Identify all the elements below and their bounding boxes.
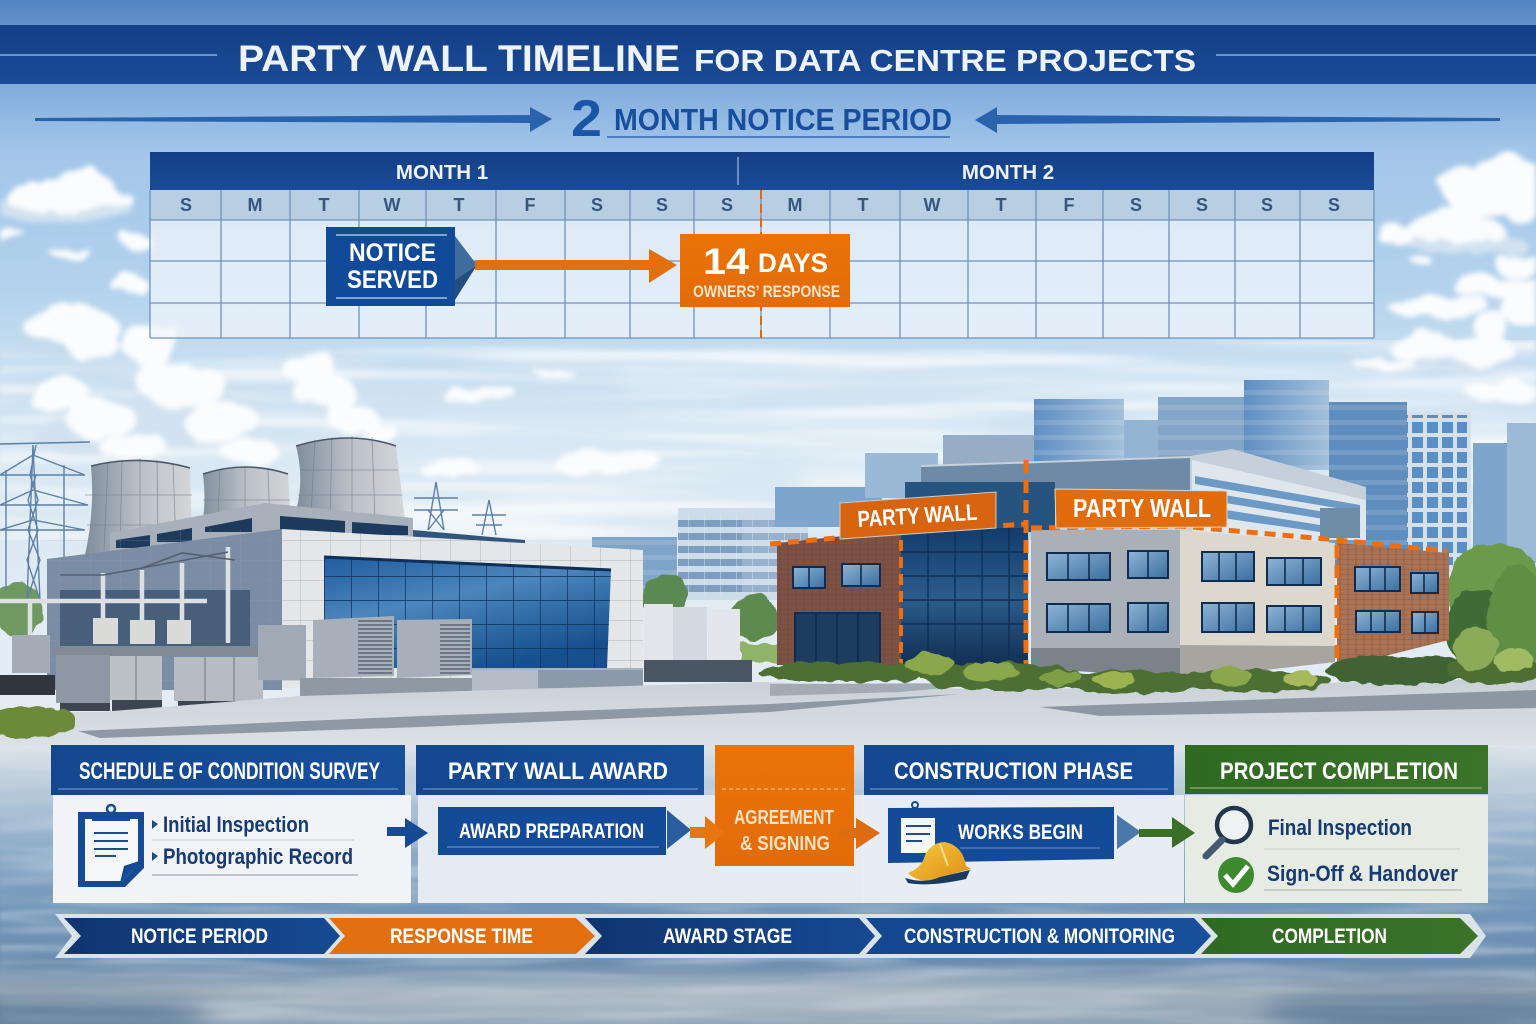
notice served marker: NOTICE	[349, 239, 436, 267]
chevron: construction and monitoring: CONSTRUCTION & MONITORING	[904, 925, 1175, 948]
weekday row: S	[721, 195, 733, 215]
cooling towers	[85, 436, 405, 555]
chevron: notice period: NOTICE PERIOD	[131, 925, 268, 948]
weekday row: S	[591, 195, 603, 215]
header: completion	[1185, 745, 1488, 794]
award preparation box: AWARD PREPARATION	[459, 820, 644, 843]
chevron: completion: COMPLETION	[1272, 925, 1387, 948]
chevron: response time: RESPONSE TIME	[390, 925, 533, 948]
cream concrete block	[1180, 530, 1335, 678]
left brick block	[777, 530, 901, 665]
data centre building	[47, 503, 643, 690]
windows	[793, 551, 1438, 667]
award preparation box	[438, 807, 691, 855]
chevron: completion	[1201, 918, 1478, 954]
works begin box	[888, 802, 1114, 863]
month header bar	[150, 152, 1374, 190]
weekday row	[150, 190, 1374, 220]
weekday row: F	[524, 195, 536, 215]
party wall dashed boundaries	[770, 460, 1447, 682]
14 days owners' response box: 14	[703, 241, 749, 282]
notice period heading with arrows	[35, 90, 1500, 148]
weekday row: S	[180, 195, 192, 215]
notice period heading with arrows: 2	[571, 90, 602, 148]
panel: agreement and signing: & SIGNING	[740, 832, 830, 855]
icon: clipboard	[78, 805, 144, 887]
list: survey items: Initial Inspection	[163, 812, 309, 837]
works begin box: WORKS BEGIN	[958, 821, 1083, 844]
shrubs	[0, 626, 1536, 738]
panel: schedule of condition survey	[51, 745, 411, 903]
weekday row: S	[1328, 195, 1340, 215]
header: survey: SCHEDULE OF CONDITION SURVEY	[79, 758, 380, 785]
panel: project completion	[1185, 745, 1488, 903]
weekday row: W	[924, 195, 940, 215]
calendar	[150, 152, 1374, 338]
arrow: construction to completion	[1117, 815, 1195, 849]
month header bar: MONTH 1	[396, 161, 488, 184]
ground and road	[0, 678, 1536, 770]
notice served marker: SERVED	[347, 266, 438, 294]
cloud streaks	[0, 340, 1536, 540]
central glass block	[901, 528, 1028, 670]
label: party wall left	[840, 492, 996, 539]
weekday row: T	[318, 195, 330, 215]
arrow: notice to 14 days	[475, 249, 677, 283]
chevron: award stage: AWARD STAGE	[663, 925, 792, 948]
14 days owners' response box: DAYS	[758, 248, 828, 278]
sky background	[0, 0, 1536, 745]
icon: magnifier	[1206, 808, 1251, 856]
front glazing	[324, 557, 611, 668]
header: construction	[864, 745, 1174, 795]
roof plant level	[110, 503, 413, 552]
list: completion items: Sign-Off & Handover	[1267, 861, 1458, 886]
arrow: survey to award	[387, 818, 428, 848]
external plant units	[644, 604, 752, 682]
weekday row: T	[454, 195, 464, 215]
arrow: award to agreement	[690, 816, 725, 849]
title banner: FOR DATA CENTRE PROJECTS	[694, 43, 1196, 78]
label: party wall left: PARTY WALL	[857, 499, 978, 532]
weekday row: T	[858, 195, 868, 215]
14 days owners' response box	[680, 234, 850, 307]
weekday row: M	[248, 195, 262, 215]
list: completion items	[1264, 815, 1462, 890]
clouds	[0, 153, 1536, 478]
panel: agreement and signing	[712, 745, 862, 903]
title banner: PARTY WALL TIMELINE	[238, 38, 680, 79]
list: survey items	[152, 812, 358, 875]
substation equipment	[0, 547, 263, 712]
header: construction: CONSTRUCTION PHASE	[894, 758, 1133, 785]
chevron: notice period	[64, 918, 340, 954]
panel: party wall award	[416, 745, 712, 903]
weekday row: S	[1261, 195, 1273, 215]
notice period heading with arrows: MONTH NOTICE PERIOD	[614, 102, 952, 137]
hvac chillers	[258, 616, 643, 702]
right brick block	[1337, 543, 1449, 668]
chevron: construction and monitoring	[866, 918, 1211, 954]
title banner	[0, 25, 1536, 84]
chevron: award stage	[585, 918, 875, 954]
label: party wall right	[1055, 489, 1227, 528]
trees behind buildings	[0, 542, 1536, 675]
background office buildings	[592, 380, 1536, 600]
header: award: PARTY WALL AWARD	[448, 758, 668, 785]
weekday row: S	[656, 195, 668, 215]
weekday row: S	[1196, 195, 1208, 215]
long sky bands	[430, 373, 1420, 488]
icon: hard hat	[905, 842, 971, 884]
notice served marker	[326, 227, 477, 306]
calendar grid body	[150, 220, 1374, 338]
list: completion items: Final Inspection	[1268, 815, 1412, 840]
header: survey	[51, 745, 405, 795]
label: party wall right: PARTY WALL	[1073, 493, 1211, 523]
weekday row: M	[788, 195, 802, 215]
weekday row: S	[1130, 195, 1142, 215]
grey side wall	[47, 529, 282, 690]
list: survey items: Photographic Record	[163, 844, 353, 869]
month header bar: MONTH 2	[962, 161, 1054, 184]
transmission pylons	[0, 442, 506, 600]
header: completion: PROJECT COMPLETION	[1220, 758, 1458, 785]
panel: construction phase	[862, 745, 1184, 903]
lower backdrop	[0, 745, 1536, 1024]
weekday row: W	[384, 195, 400, 215]
grey concrete block	[1031, 530, 1180, 678]
white front facade	[282, 529, 643, 688]
stage chevron bar	[55, 914, 1486, 958]
icon: green check	[1218, 857, 1254, 893]
header: award	[416, 745, 704, 795]
process panels	[51, 745, 1488, 903]
weekday row: T	[996, 195, 1006, 215]
party wall buildings	[770, 460, 1449, 682]
fog and water texture	[0, 740, 1536, 1024]
weekday row: F	[1064, 195, 1074, 215]
panel: agreement and signing: AGREEMENT	[734, 806, 834, 829]
mid-rise glass building	[905, 449, 1366, 540]
arrow: agreement to construction	[838, 818, 880, 849]
14 days owners' response box: OWNERS’ RESPONSE	[693, 283, 840, 301]
chevron: response time	[329, 918, 595, 954]
